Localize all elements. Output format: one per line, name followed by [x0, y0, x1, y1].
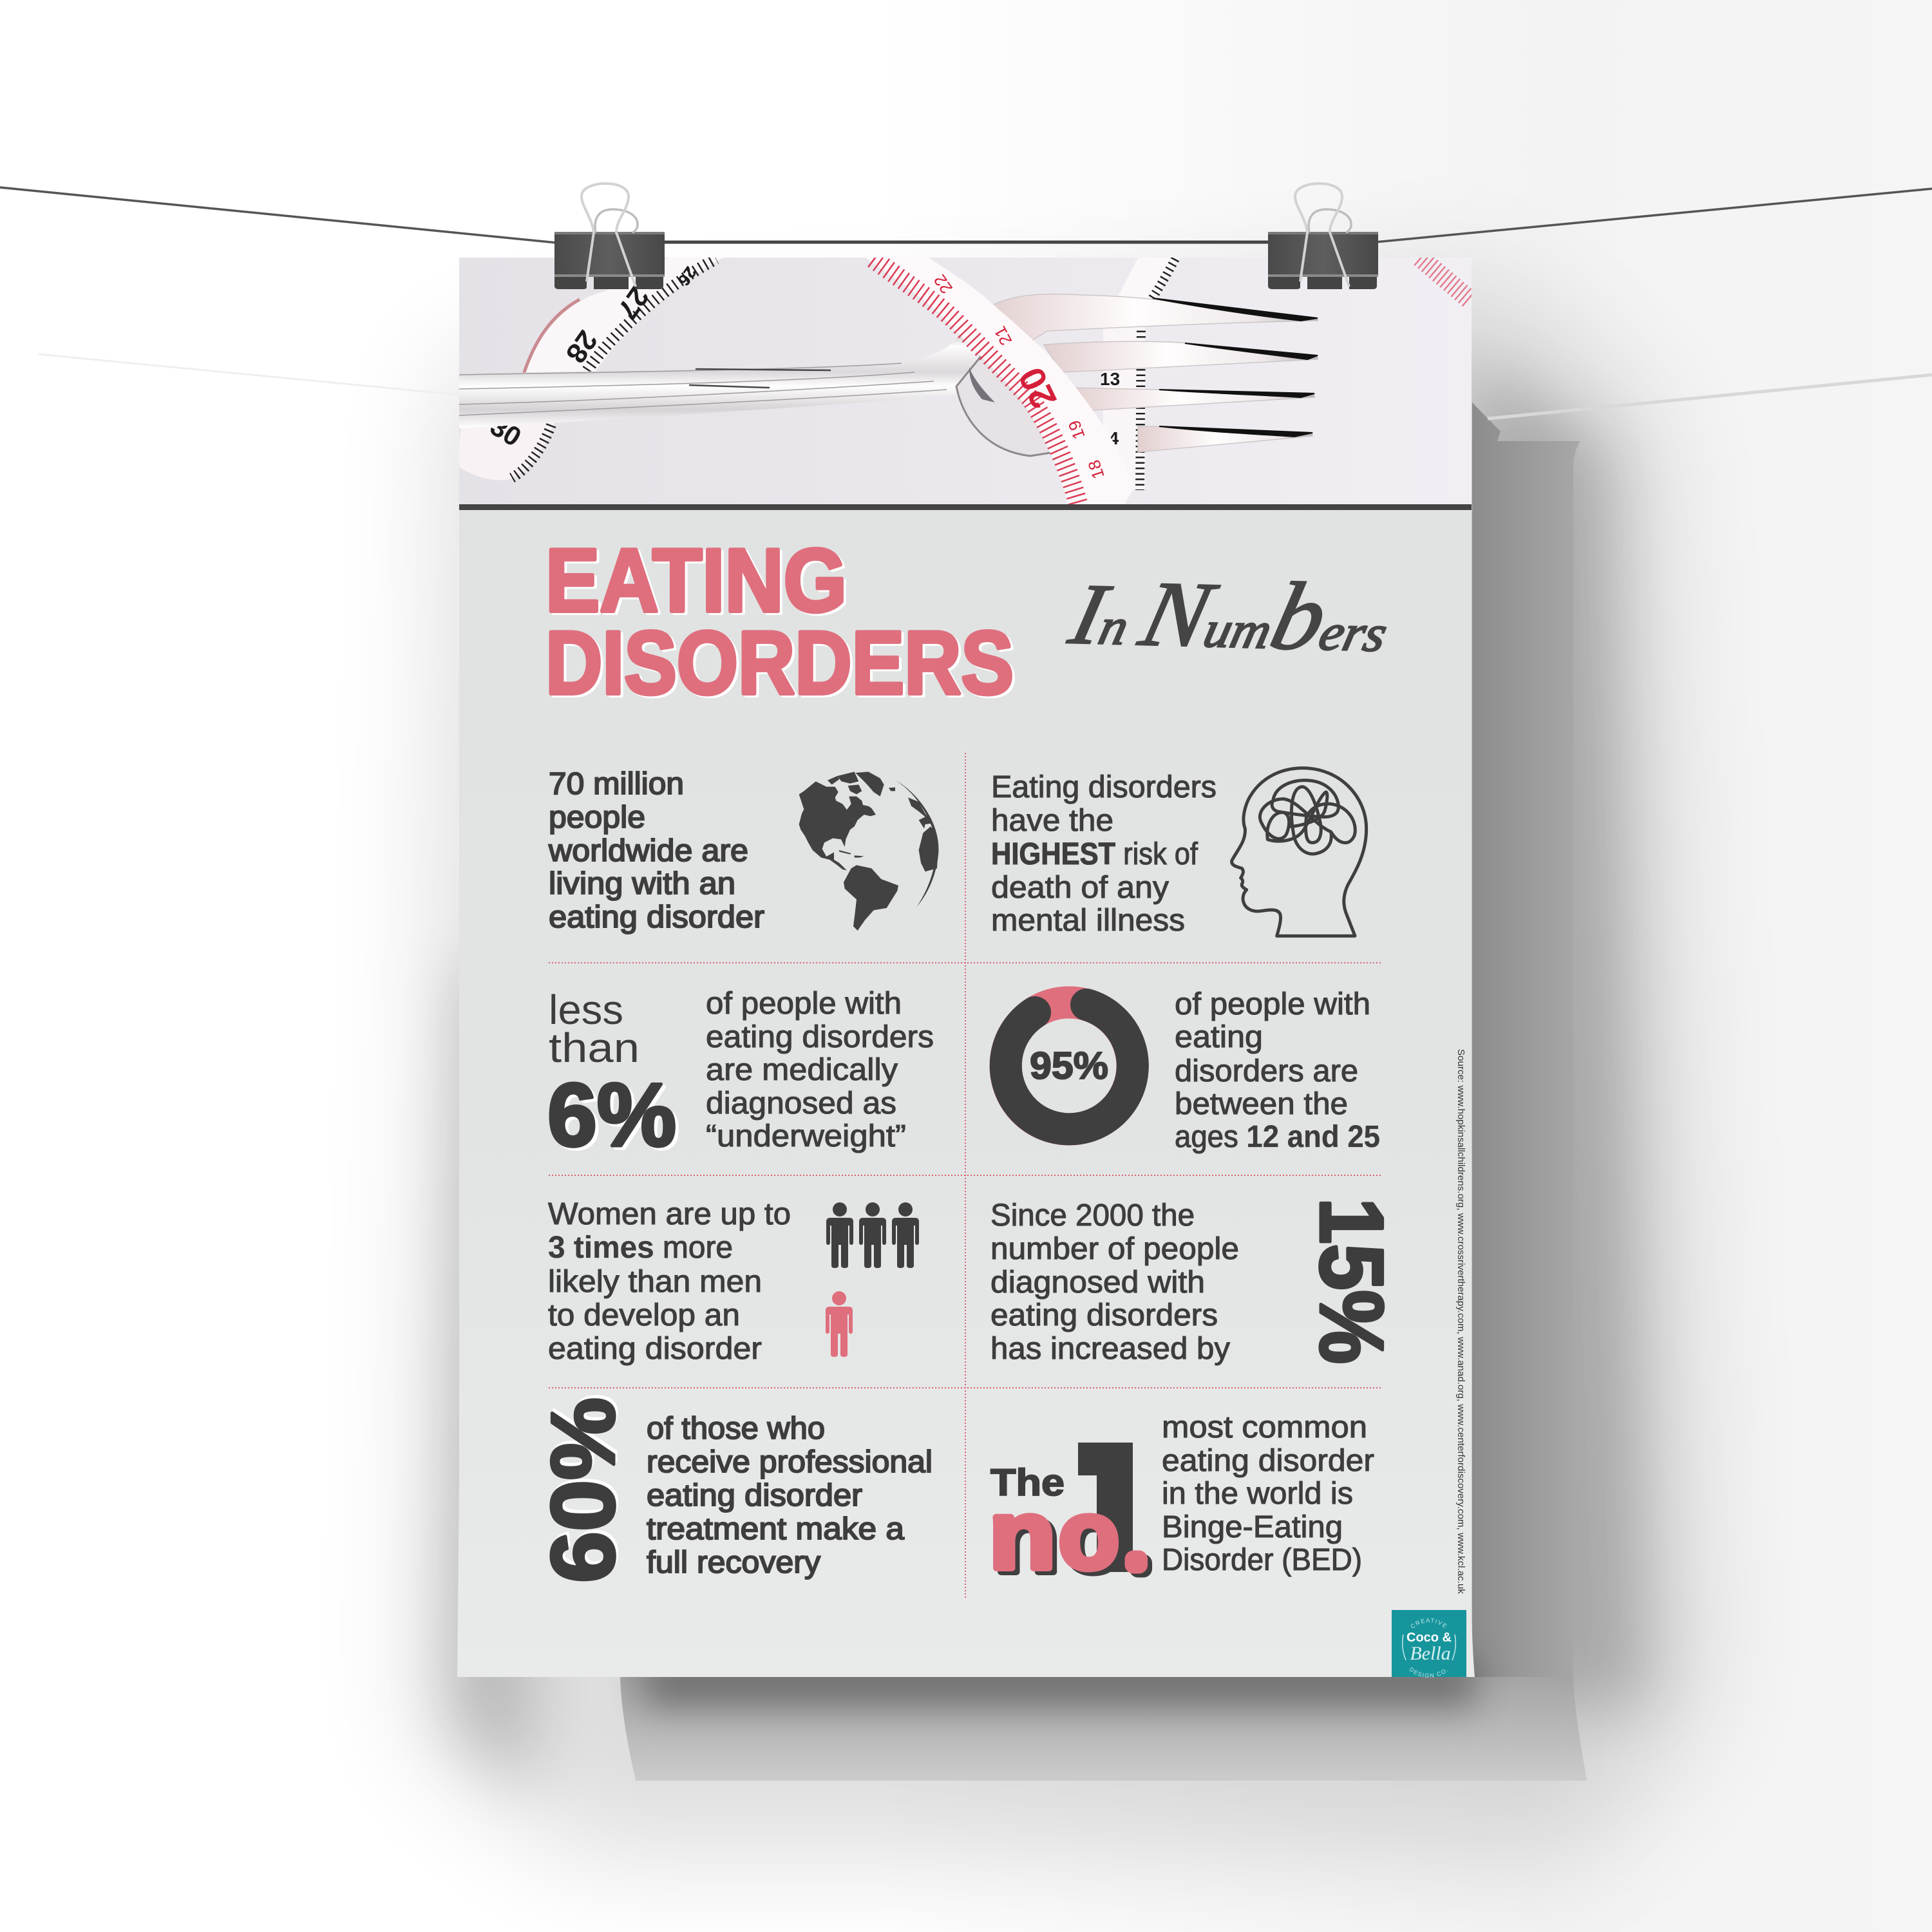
fact: women 3 times more likely: to develop an — [548, 1298, 740, 1332]
fact: 70 million: 70 million — [549, 767, 684, 801]
fact: ages 12 and 25: eating — [1175, 1020, 1263, 1054]
fact: since 2000: diagnosed with — [990, 1265, 1205, 1300]
stat: 60% rotated: 60% — [535, 1394, 635, 1580]
donut chart: 95%: 95% — [1030, 1045, 1108, 1087]
fact: Binge-Eating Disorder: in the world is — [1162, 1477, 1353, 1511]
header rule — [459, 504, 1472, 510]
fact: 70 million: people — [549, 800, 645, 835]
fact: since 2000: has increased by — [990, 1332, 1230, 1366]
shadow darkening under poster edge — [644, 1662, 1475, 1707]
stat: The no. 1: n — [994, 1484, 1060, 1593]
icon: one man — [826, 1291, 853, 1357]
fact: Binge-Eating Disorder: Binge-Eating — [1162, 1510, 1343, 1544]
binder clip: left — [554, 184, 665, 289]
fork handle — [459, 335, 976, 428]
fact: less than 6%: 6% — [551, 1068, 679, 1168]
fact: highest risk of death: death of any — [991, 871, 1169, 905]
wire shadows on wall — [39, 354, 1932, 419]
header photo: fork and measuring tape — [459, 257, 1472, 506]
cast shadow: below poster — [620, 1677, 1587, 1781]
tape: upper left strip — [524, 257, 724, 374]
stat: The no. 1: o — [1063, 1484, 1124, 1593]
tape: strip behind tines — [1099, 258, 1180, 490]
title: Eating Disorders: DISORDERS — [548, 615, 1016, 715]
hanging wires — [0, 187, 1932, 243]
fact: 70 million: worldwide are — [548, 834, 748, 868]
logo badge: DESIGN CO. — [1409, 1667, 1448, 1678]
fact: full recovery: full recovery — [647, 1546, 820, 1580]
fact: Binge-Eating Disorder: eating disorder — [1162, 1444, 1374, 1478]
red measuring tape: 22 — [930, 271, 956, 298]
title: Eating Disorders: DISORDERS — [545, 613, 1014, 713]
fact: ages 12 and 25: between the — [1175, 1087, 1348, 1121]
fact: women 3 times more likely: eating disorder — [548, 1332, 762, 1366]
tape corner, top right — [1420, 258, 1472, 301]
fact: less than 6%: less — [549, 987, 623, 1033]
fact: full recovery: receive professional — [647, 1445, 933, 1479]
red measuring tape: 18 — [1084, 458, 1108, 481]
fact: Binge-Eating Disorder: Disorder (BED) — [1162, 1543, 1362, 1577]
red measuring tape — [866, 258, 1135, 506]
stat: 15% rotated: 15% — [1302, 1198, 1401, 1364]
fact: ages 12 and 25: ages 12 and 25 — [1175, 1120, 1380, 1154]
fact: less than 6%: “underweight” — [706, 1119, 906, 1153]
stat: The no. 1: o — [1059, 1481, 1119, 1589]
logo badge: Bella — [1410, 1643, 1451, 1664]
fact: highest risk of death: mental illness — [991, 904, 1185, 938]
red measuring tape: 21 — [990, 323, 1016, 348]
fact: highest risk of death: Eating disorders — [991, 770, 1217, 804]
stat: The no. 1 — [989, 1397, 1151, 1613]
fact: full recovery: treatment make a — [647, 1512, 904, 1546]
cast shadow: right of poster — [1472, 402, 1580, 1687]
fact: highest risk of death: HIGHEST risk of — [991, 837, 1198, 871]
dotted grid dividers — [549, 753, 1381, 1598]
fact: less than 6%: of people with — [706, 987, 902, 1021]
tape: lower left strip: 30 — [485, 411, 527, 452]
tape: lower left strip — [459, 422, 556, 482]
fact: women 3 times more likely: 3 times more — [548, 1231, 733, 1265]
fork tines — [985, 294, 1318, 452]
tape: upper left strip: 26 — [674, 263, 701, 289]
fact: 70 million: eating disorder — [549, 900, 764, 934]
fact: since 2000: eating disorders — [990, 1298, 1218, 1332]
fact: Binge-Eating Disorder: most common — [1162, 1410, 1367, 1444]
subtitle: In Numbers: In Numbers — [1061, 557, 1403, 672]
tape: upper left strip: 27 — [611, 281, 655, 325]
fact: highest risk of death — [991, 770, 1217, 938]
fact: full recovery: of those who — [647, 1412, 825, 1446]
fact: less than 6%: diagnosed as — [706, 1086, 896, 1121]
soft wall shadows — [425, 277, 1700, 1855]
title: Eating Disorders — [545, 531, 1016, 715]
tape: strip behind tines: 14 — [1099, 428, 1119, 448]
fact: women 3 times more likely: Women are up to — [548, 1197, 791, 1231]
fork bowl — [955, 355, 1050, 457]
fact: since 2000 — [990, 1198, 1239, 1366]
fact: since 2000: number of people — [990, 1232, 1239, 1266]
fact: less than 6%: than — [549, 1025, 639, 1071]
tape: strip behind tines: 13 — [1100, 369, 1120, 389]
red measuring tape: 20 — [1010, 361, 1065, 415]
stat: The no. 1: n — [989, 1481, 1056, 1589]
title: Eating Disorders: EATING — [545, 531, 847, 630]
fact: less than 6%: are medically — [706, 1053, 898, 1087]
fact: since 2000: Since 2000 the — [990, 1198, 1195, 1233]
title: Eating Disorders: EATING — [548, 533, 849, 632]
stat: The no. 1: . — [1135, 1534, 1146, 1577]
fact: women 3 times more likely: likely than men — [548, 1265, 762, 1299]
fact: full recovery — [647, 1412, 933, 1580]
fact: full recovery: eating disorder — [647, 1479, 862, 1513]
icon: head with tangled thoughts — [1232, 768, 1367, 936]
fact: ages 12 and 25 — [1175, 987, 1380, 1154]
poster sheet — [457, 258, 1475, 1677]
fact: 70 million: living with an — [549, 867, 735, 901]
logo badge: Coco & — [1406, 1631, 1452, 1645]
logo badge: CREATIVE — [1411, 1618, 1447, 1628]
tape: upper left strip: 28 — [560, 325, 603, 368]
fact: less than 6%: eating disorders — [706, 1020, 934, 1054]
fact: less than 6% — [547, 987, 934, 1168]
stat: The no. 1: The — [990, 1462, 1065, 1504]
icon: three women — [826, 1202, 919, 1268]
fact: highest risk of death: have the — [991, 804, 1113, 838]
logo badge — [1392, 1610, 1466, 1678]
fact: women 3 times more likely — [548, 1197, 791, 1366]
stat: The no. 1: . — [1131, 1530, 1142, 1573]
stat: The no. 1: 1 — [1043, 1397, 1151, 1613]
icon: globe — [799, 772, 938, 931]
fact: 70 million — [548, 767, 764, 934]
red measuring tape: 19 — [1065, 418, 1089, 442]
fact: less than 6%: 6% — [547, 1065, 676, 1165]
stat: 60% rotated: 60% — [533, 1397, 633, 1583]
donut chart: 95% — [1006, 1002, 1133, 1130]
fact: ages 12 and 25: disorders are — [1175, 1054, 1358, 1088]
fact: ages 12 and 25: of people with — [1175, 987, 1370, 1021]
binder clip: right — [1268, 184, 1378, 289]
fact: Binge-Eating Disorder — [1162, 1410, 1374, 1577]
sources note: Source: www.hopkinsallchildrens.org, www.crossrivertherapy.com, www.anad.org, www.centerfordiscovery.com, www.kcl.ac.uk — [1455, 1049, 1466, 1594]
